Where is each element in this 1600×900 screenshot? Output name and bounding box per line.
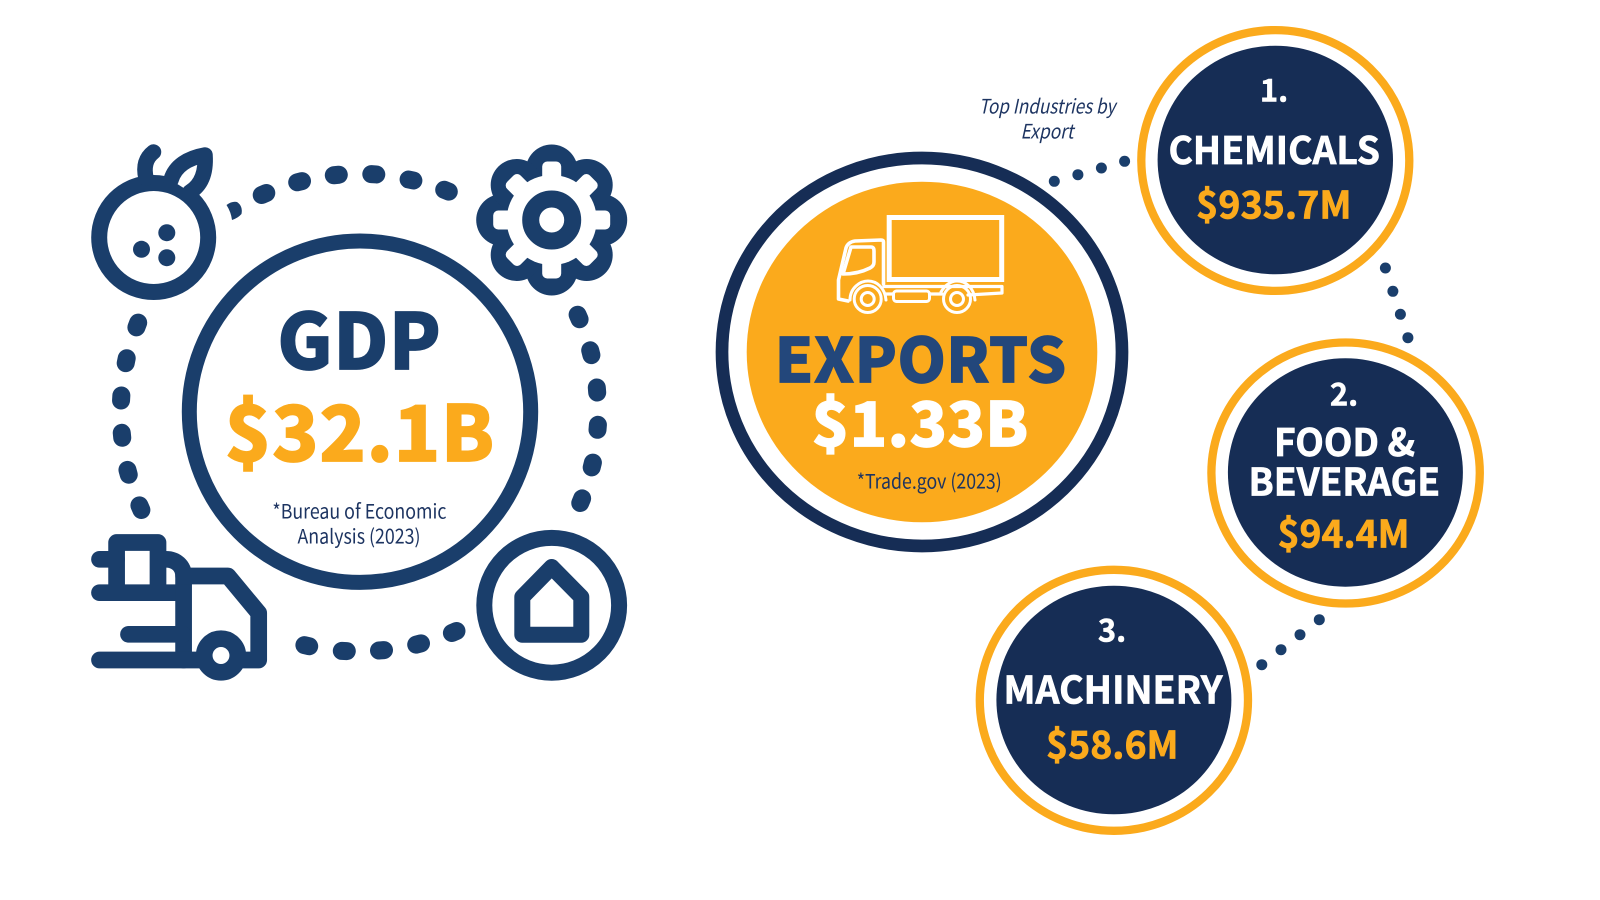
connector dots: exports to chemicals	[1049, 156, 1130, 187]
icon: delivery truck	[100, 542, 259, 672]
icon: box truck	[838, 218, 1002, 312]
caption: top industries: Top Industries by	[979, 90, 1118, 119]
industry name: FOOD &	[1274, 412, 1415, 467]
connector dots: chemicals to food	[1380, 262, 1413, 343]
icon: house	[484, 538, 619, 673]
industry value: $94.4M	[1278, 504, 1410, 559]
connector dots: food to machinery	[1256, 614, 1325, 670]
rank: 1.	[1260, 66, 1288, 111]
exports value: $1.33B	[812, 375, 1028, 465]
GDP heading: GDP	[277, 280, 441, 392]
caption: top industries: Export	[1020, 115, 1076, 144]
GDP source note: *Bureau of Economic	[272, 495, 446, 524]
exports source note: *Trade.gov (2023)	[857, 465, 1002, 494]
industry name: BEVERAGE	[1248, 452, 1440, 507]
industry name: MACHINERY	[1004, 659, 1223, 714]
icon: fruit	[99, 152, 208, 292]
panel: machinery	[980, 570, 1248, 831]
rank: 2.	[1330, 370, 1358, 415]
exports ring	[722, 158, 1122, 546]
industry value: $58.6M	[1046, 714, 1178, 769]
exports orange disc	[747, 182, 1097, 522]
caption: top industries	[979, 90, 1118, 144]
rank: 3.	[1098, 606, 1126, 651]
dotted ring connecting icons	[121, 174, 598, 651]
industry name: CHEMICALS	[1168, 120, 1380, 175]
GDP value: $32.1B	[224, 373, 494, 485]
GDP source note: Analysis (2023)	[298, 520, 420, 549]
panel: food and beverage	[1211, 342, 1480, 604]
exports heading: EXPORTS	[774, 311, 1066, 401]
industry name	[1248, 412, 1440, 507]
industry value: $935.7M	[1196, 174, 1352, 229]
panel: chemicals	[1141, 30, 1409, 291]
GDP source note	[272, 495, 446, 549]
icon: gear	[476, 144, 627, 296]
GDP ring	[189, 241, 531, 582]
panel: exports	[722, 158, 1122, 546]
panel: GDP cycle	[99, 144, 627, 673]
